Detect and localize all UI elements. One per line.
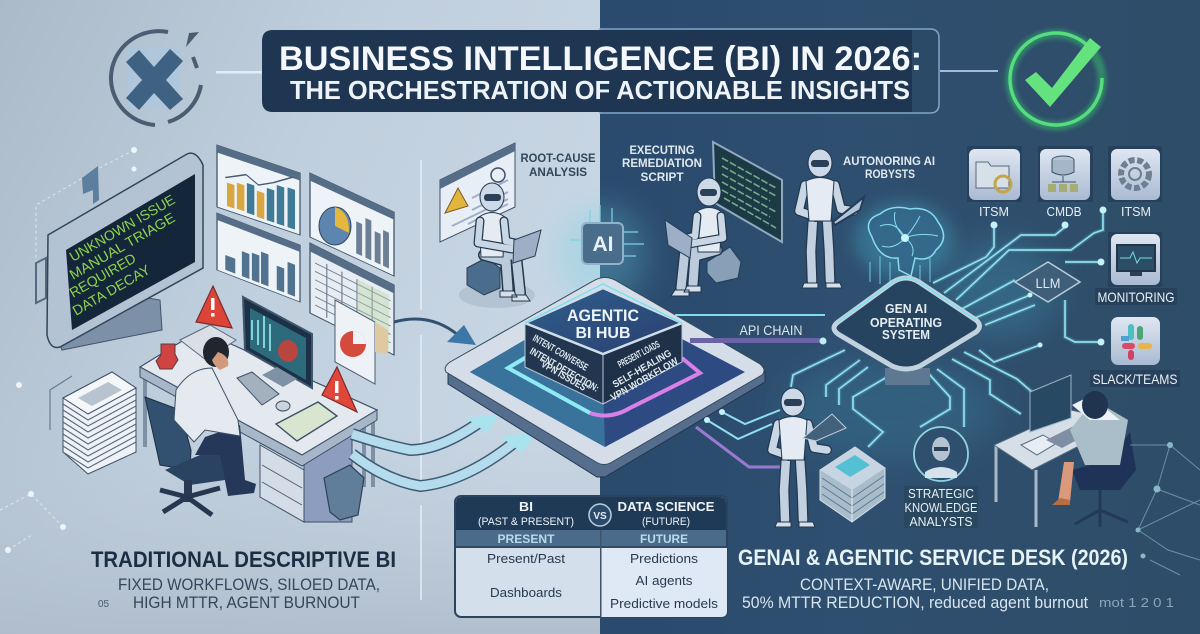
desk top bbox=[140, 330, 377, 455]
hub glow: cyan circuit bbox=[508, 355, 590, 413]
root-cause analysis panel bbox=[440, 143, 596, 242]
table header: data science: DATA SCIENCE bbox=[618, 499, 715, 514]
table data science column: Predictive models bbox=[610, 596, 719, 611]
red flask bbox=[156, 344, 178, 369]
robot: monitoring analyst bbox=[799, 149, 864, 288]
title line 2: THE ORCHESTRATION OF ACTIONABLE INSIGHTS bbox=[290, 75, 910, 105]
label: executing remediation script bbox=[622, 143, 702, 184]
icon: VS badge: VS bbox=[593, 511, 607, 522]
icon: green check mark bbox=[1010, 33, 1102, 126]
label: strategic knowledge analysts bbox=[904, 486, 978, 529]
GenAI operating system hub bbox=[834, 278, 980, 385]
arrow: blue dashboards to hub bbox=[394, 319, 476, 345]
agent person bbox=[1052, 391, 1128, 505]
monitor text: UNKNOWN ISSUE bbox=[66, 191, 178, 265]
OS label line 3: SYSTEM bbox=[882, 327, 930, 342]
hub left-face text: INTENT CONVERSE bbox=[530, 333, 590, 374]
icon: glowing brain bbox=[854, 202, 954, 284]
paper stack bbox=[50, 372, 136, 474]
title banner bbox=[262, 29, 939, 113]
icon: ITSM gear bbox=[1108, 146, 1162, 202]
label: executing remediation script: SCRIPT bbox=[640, 170, 684, 184]
OS label line 2: OPERATING bbox=[870, 315, 942, 330]
table BI column bbox=[487, 551, 565, 600]
tablet bbox=[276, 402, 337, 441]
robot: lower service agent bbox=[772, 388, 846, 527]
text: traditional BI summary: HIGH MTTR, AGENT BURNOUT bbox=[133, 593, 360, 612]
label: strategic knowledge analysts: STRATEGIC bbox=[908, 486, 974, 501]
table BI column: Present/Past bbox=[487, 551, 565, 566]
hub right-face text: PRESENT LOADS bbox=[616, 339, 662, 371]
title line 1: BUSINESS INTELLIGENCE (BI) IN 2026: bbox=[279, 40, 922, 78]
table data science column: Predictions bbox=[630, 551, 699, 566]
dashboard panel: small pie bbox=[335, 300, 388, 384]
icon: ITSM folder gear bbox=[967, 146, 1022, 202]
network pattern lower right bbox=[1130, 442, 1200, 575]
arrow: light data flow lower bbox=[352, 433, 536, 486]
label: Slack/Teams: SLACK/TEAMS bbox=[1092, 371, 1178, 387]
arrow: light data flow upper bbox=[352, 414, 499, 450]
hub tower bbox=[525, 284, 682, 404]
label: monitoring: MONITORING bbox=[1098, 289, 1174, 305]
icon: AI chip bbox=[570, 205, 644, 264]
monitor text: DATA DECAY bbox=[70, 261, 153, 319]
agent chair bbox=[1072, 432, 1136, 527]
keyboard and mouse bbox=[237, 372, 279, 405]
label: strategic knowledge analysts: KNOWLEDGE bbox=[904, 500, 978, 515]
text: traditional BI summary bbox=[118, 575, 380, 612]
label: ITSM second: ITSM bbox=[1121, 204, 1151, 219]
small stray glyph: 05 bbox=[98, 599, 110, 610]
table header: data science: (FUTURE) bbox=[642, 516, 690, 528]
hub right-face text: VPN WORKFLOW bbox=[609, 356, 681, 404]
dashboard panel: bar chart bbox=[217, 213, 300, 302]
label: ITSM: ITSM bbox=[979, 204, 1009, 219]
icon: monitoring screen bbox=[1108, 232, 1162, 287]
table data science column bbox=[610, 551, 719, 611]
hub glow: magenta circuit bbox=[590, 358, 700, 416]
root-cause analysis panel: ANALYSIS bbox=[529, 165, 587, 179]
table BI column: Dashboards bbox=[490, 585, 563, 600]
trace end nodes bbox=[704, 206, 1106, 423]
robot: remediation executor bbox=[665, 178, 741, 296]
chair bbox=[145, 397, 235, 515]
icon: VS badge bbox=[589, 504, 611, 526]
worker bbox=[174, 337, 256, 496]
panel: GenAI service desk background bbox=[600, 0, 1200, 634]
table subheaders: FUTURE bbox=[640, 532, 688, 546]
faint trailing text: mot 1 2 0 1 bbox=[1099, 595, 1174, 610]
OS label line 1: GEN AI bbox=[885, 301, 927, 316]
dashboard panel: bar and line chart bbox=[217, 145, 300, 235]
label: autonomous AI robots: ROBYSTS bbox=[865, 167, 915, 181]
monitor text: MANUAL TRIAGE bbox=[66, 209, 178, 283]
icon: Slack bbox=[1111, 317, 1160, 365]
circuit traces bbox=[696, 212, 1103, 467]
heading: GenAI and agentic service desk: GENAI & AGENTIC SERVICE DESK (2026) bbox=[738, 545, 1128, 570]
label: autonomous AI robots bbox=[843, 154, 935, 181]
monitor text bbox=[66, 191, 178, 319]
hub left-face text: "VPN ISSUES" bbox=[536, 357, 591, 396]
desk drawers bbox=[260, 445, 304, 522]
icon: AI chip: AI bbox=[592, 233, 614, 256]
icon: knowledge analyst bbox=[914, 427, 968, 481]
table header: BI bbox=[478, 499, 574, 528]
warning triangle upper bbox=[196, 286, 232, 328]
connector: title to X bbox=[216, 71, 262, 74]
table subheaders bbox=[498, 532, 688, 546]
icon: failed X mark bbox=[111, 31, 201, 125]
trash bin bbox=[324, 465, 364, 520]
hub title: AGENTIC bbox=[567, 306, 639, 325]
desk and worker bbox=[140, 297, 377, 522]
hub left-face text: INTENT DETECTION: bbox=[528, 346, 601, 395]
terminal panel bbox=[713, 142, 782, 242]
dashboard panel: pie chart bbox=[310, 173, 394, 276]
left wall monitor bbox=[36, 153, 203, 350]
LLM chip bbox=[1015, 262, 1080, 302]
icon: unplugged cable bbox=[82, 166, 99, 204]
API chain connector bbox=[675, 315, 826, 344]
table header: BI: (PAST & PRESENT) bbox=[478, 516, 574, 528]
API chain connector: API CHAIN bbox=[740, 322, 802, 338]
agent monitor bbox=[1030, 375, 1071, 432]
monitor text: REQUIRED bbox=[66, 250, 139, 301]
LLM chip: LLM bbox=[1036, 275, 1060, 291]
hub right-face text: SELF-HEALING bbox=[611, 348, 674, 391]
hub tower: BI HUB bbox=[576, 325, 630, 342]
dashboard panel: spreadsheet bbox=[310, 243, 394, 355]
heading: traditional descriptive BI: TRADITIONAL DESCRIPTIVE BI bbox=[91, 547, 396, 572]
text: GenAI summary: 50% MTTR REDUCTION, reduced agent burnout bbox=[742, 593, 1088, 612]
root-cause label: ROOT-CAUSE bbox=[520, 151, 596, 165]
icon: CMDB database bbox=[1038, 146, 1093, 202]
table subheaders: PRESENT bbox=[498, 532, 555, 546]
table header: data science bbox=[618, 499, 715, 528]
table data science column: AI agents bbox=[636, 573, 693, 588]
comparison table bbox=[455, 496, 727, 617]
desk monitor bbox=[243, 297, 312, 388]
agentic BI hub platform bbox=[445, 278, 765, 477]
connector: title to check bbox=[940, 70, 998, 72]
warning triangle lower bbox=[322, 367, 357, 412]
service desk and human agent bbox=[994, 375, 1136, 527]
papers on desk bbox=[180, 325, 236, 360]
label: autonomous AI robots: AUTONORING AI bbox=[843, 154, 935, 168]
label: executing remediation script: REMEDIATION bbox=[622, 156, 702, 170]
text: GenAI summary bbox=[742, 575, 1088, 612]
server rack bbox=[820, 447, 885, 522]
robot: root-cause analyst bbox=[459, 183, 541, 308]
pie chart glyph bbox=[319, 207, 351, 245]
table header: BI: BI bbox=[519, 499, 533, 514]
label: executing remediation script: EXECUTING bbox=[630, 143, 694, 157]
label: strategic knowledge analysts: ANALYSTS bbox=[910, 514, 973, 529]
text: GenAI summary: CONTEXT-AWARE, UNIFIED DATA, bbox=[800, 575, 1049, 594]
panel: traditional BI background bbox=[0, 0, 600, 634]
text: traditional BI summary: FIXED WORKFLOWS, SILOED DATA, bbox=[118, 575, 380, 594]
label: CMDB: CMDB bbox=[1046, 204, 1082, 219]
